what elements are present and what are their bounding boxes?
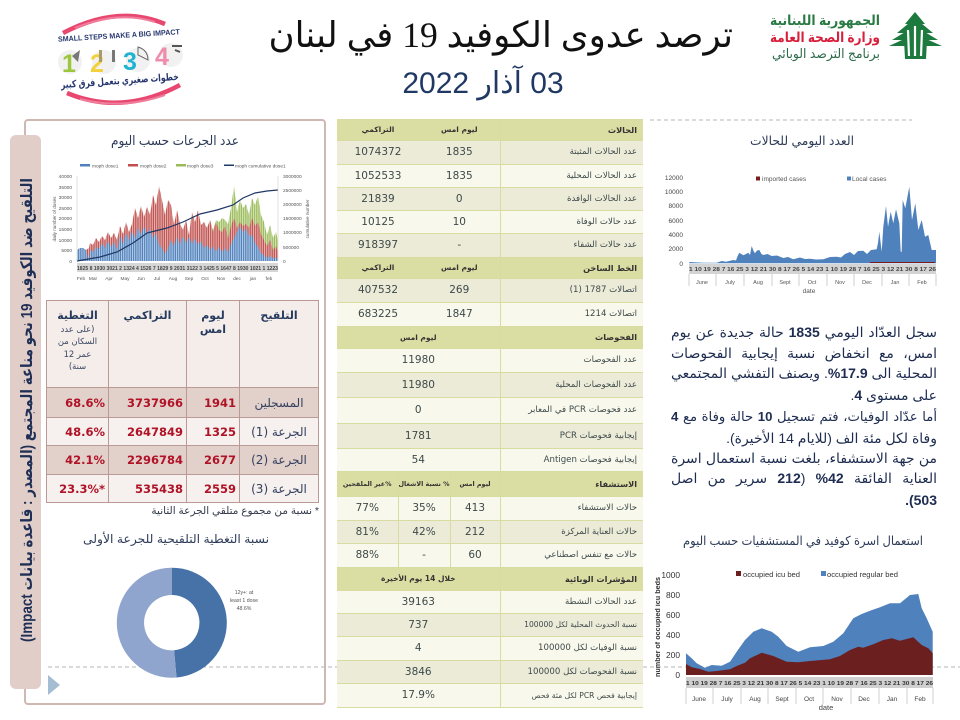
section: hospitalization: 81% [356, 526, 379, 538]
chart: first dose donut [117, 568, 258, 678]
table: vaccination counts: 42.1% [65, 453, 105, 467]
section: tests: 54 [412, 454, 425, 466]
logo: small steps make a big impact: 4 [155, 43, 169, 71]
chart: daily vaccine doses: moph dose3 [187, 164, 214, 170]
section: hotline: اتصالات 1214 [585, 309, 637, 319]
table: vaccination counts: (على عدد [61, 324, 94, 334]
chart: daily vaccine doses: 1825 8 1930 3021 2 1324 4 1526 7 1829 9 2031 3122 3 1425 5 1647 8 1930 1021 1 1223 [77, 266, 278, 272]
chart: daily vaccine doses: dec [233, 276, 241, 282]
logo: ministry of public health: برنامج الترصد الوبائي [772, 46, 880, 62]
chart: daily vaccine doses: moph dose1 [92, 164, 119, 170]
section: epidemiological indicators: نسبة الحدوث المحلية لكل 100000 [524, 620, 637, 629]
section: hospitalization: حالات العناية المركزة [561, 527, 637, 537]
section: cases [337, 120, 643, 257]
section: hospitalization [337, 472, 643, 567]
table: vaccination counts: 2647849 [127, 424, 183, 438]
section: epidemiological indicators: 737 [408, 619, 428, 631]
chart: occupied hospital beds: 800 [666, 590, 680, 600]
section: epidemiological indicators: إيجابية فحص PCR لكل مئة فحص [532, 691, 637, 700]
chart: daily vaccine doses: Sep [185, 276, 194, 282]
section: hospitalization: الاستشفاء [595, 479, 637, 489]
chart: daily vaccine doses: Nov [217, 276, 226, 282]
text block: daily summary: وفاة لكل مئة الف (للايام 14 الأخيرة). [726, 430, 937, 446]
chart: daily vaccine doses: moph dose2 [140, 164, 167, 170]
table: vaccination counts: السكان من [58, 336, 97, 346]
table: vaccination counts: 535438 [135, 482, 183, 496]
text block: daily summary: أما عدّاد الوفيات، فتم تسجيل 10 حالة وفاة مع 4 [671, 409, 937, 424]
section: hospitalization: - [422, 549, 426, 561]
section: tests: 0 [415, 404, 422, 416]
section: epidemiological indicators: عدد الحالات النشطة [565, 597, 637, 607]
chart: occupied hospital beds: June [692, 696, 706, 703]
section: cases: عدد حالات الشفاء [574, 240, 637, 250]
chart: daily cases: 2000 [669, 246, 683, 253]
section: hospitalization: %غير الملقحين [343, 480, 392, 488]
chart: daily vaccine doses: 2000000 [283, 202, 302, 208]
chart: daily cases: 12000 [665, 175, 683, 182]
section: hotline: الخط الساخن [583, 263, 637, 273]
logo: small steps make a big impact: خطوات صغيري بتعمل فرق كبير [60, 72, 179, 91]
logo: ministry of public health [770, 12, 942, 62]
chart: daily vaccine doses: Mar [89, 276, 98, 282]
chart: occupied hospital beds: Sept [775, 696, 789, 703]
icon: cedar tree [889, 12, 942, 59]
section: epidemiological indicators: 4 [415, 642, 422, 654]
date: 03 آذار 2022 [402, 67, 564, 100]
logo: ministry of public health: الجمهورية اللبنانية [770, 12, 880, 29]
icon: slide arrow [48, 675, 60, 695]
section: hospitalization: ليوم امس [459, 480, 491, 488]
chart: daily vaccine doses: cumulative number [305, 199, 310, 238]
table: vaccination counts: 23.3%* [59, 482, 105, 496]
chart: daily vaccine doses: 35000 [59, 185, 72, 191]
chart: daily cases: Aug [753, 280, 763, 286]
section: hospitalization: 88% [356, 549, 379, 561]
section: epidemiological indicators: نسبة الفحوصات لكل 100000 [528, 667, 637, 677]
footnote: second dose: * نسبة من مجموع متلقي الجرعة الثانية [151, 505, 319, 517]
table: vaccination counts: 68.6% [65, 396, 105, 410]
text block: daily summary: على مستوى 4. [850, 387, 937, 403]
chart: occupied hospital beds: 600 [666, 610, 680, 620]
chart: daily vaccine doses: Jun [137, 276, 145, 282]
section: cases: عدد الحالات المحلية [566, 171, 637, 181]
chart: daily vaccine doses: 0 [69, 259, 72, 265]
chart: daily vaccine doses: 25000 [59, 206, 72, 212]
chart: occupied hospital beds: Dec [858, 696, 871, 703]
section: cases: 1074372 [355, 146, 401, 158]
text block: daily summary: 503). [905, 492, 937, 508]
table: vaccination counts: الجرعة (1) [251, 424, 307, 438]
section: cases: عدد الحالات المثبتة [570, 147, 637, 157]
chart: daily vaccine doses: 30000 [59, 195, 72, 201]
table: vaccination counts: ليوم [201, 309, 225, 322]
section: tests: عدد فحوصات PCR في المعابر [528, 405, 637, 415]
chart: daily cases: June [696, 280, 708, 286]
chart: daily vaccine doses: 20000 [59, 216, 72, 222]
text block: daily summary [671, 324, 937, 508]
section: hotline: ليوم امس [441, 263, 478, 272]
chart: daily cases: July [725, 280, 735, 286]
section: cases: 918397 [358, 239, 398, 251]
section: hotline [337, 258, 643, 326]
chart: daily cases: Oct [808, 280, 817, 286]
section: cases: 10 [453, 216, 466, 228]
logo: small steps make a big impact: 3 [123, 48, 137, 76]
chart: daily cases: imported cases [762, 176, 807, 183]
section: tests: إيجابية فحوصات PCR [560, 431, 637, 441]
section: tests: ليوم امس [400, 333, 437, 342]
section: hotline: التراكمي [362, 263, 394, 272]
section: hospitalization: 35% [412, 502, 436, 514]
table: vaccination counts: التلقيح [260, 309, 298, 322]
section: epidemiological indicators: 3846 [405, 666, 432, 678]
chart: daily cases: 6000 [669, 218, 683, 225]
chart: daily vaccine doses: Jul [154, 276, 160, 282]
section: tests: عدد الفحوصات [583, 355, 637, 365]
table: vaccination counts: امس [200, 323, 226, 336]
chart: daily vaccine doses: 1000000 [283, 230, 302, 236]
panel: vaccination frame [25, 120, 325, 704]
chart: daily cases: date [803, 288, 816, 295]
table: vaccination counts: عمر 12 [64, 349, 91, 359]
section: hospitalization: 60 [468, 549, 482, 561]
table: vaccination counts: 3737966 [127, 396, 183, 410]
chart: daily cases: Nov [835, 280, 845, 286]
chart: daily vaccine doses: May [120, 276, 130, 282]
logo: small steps make a big impact [58, 16, 183, 104]
section: epidemiological indicators: المؤشرات الوبائية [565, 574, 637, 584]
section: epidemiological indicators: خلال 14 يوم الأخيرة [381, 574, 456, 583]
section: cases: - [457, 239, 461, 251]
table: vaccination counts: 1325 [204, 424, 236, 438]
section: hotline: اتصالات 1787 (1) [570, 285, 637, 295]
chart: occupied hospital beds: Aug [749, 696, 761, 703]
section: hotline: 1847 [446, 308, 473, 320]
table: vaccination counts: 2559 [204, 482, 236, 496]
chart: daily cases: Feb [917, 280, 927, 286]
logo: ministry of public health: وزارة الصحة العامة [770, 29, 880, 46]
chart: daily vaccine doses: jan [249, 276, 257, 282]
table: vaccination counts: الجرعة (2) [251, 453, 307, 467]
section: cases: عدد الحالات الوافدة [567, 194, 637, 204]
section: epidemiological indicators: 39163 [402, 596, 435, 608]
chart: daily vaccine doses [52, 164, 310, 282]
section: tests: 1781 [405, 430, 432, 442]
section: hospitalization: حالات الاستشفاء [578, 503, 637, 513]
section: tests: 11980 [402, 379, 435, 391]
chart: first dose donut: least 1 dose [230, 598, 258, 604]
text block: daily summary: من جهة الاستشفاء، بلغت نسبة استعمال اسرة [671, 450, 937, 466]
heading: daily cases: العدد اليومي للحالات [750, 134, 854, 149]
chart: occupied hospital beds: Oct [804, 696, 814, 703]
chart: daily cases: Dec [862, 280, 872, 286]
section: hospitalization: 77% [356, 502, 379, 514]
section: cases: ليوم امس [441, 125, 478, 134]
table: vaccination counts [46, 300, 319, 503]
section: cases: 1835 [446, 170, 473, 182]
chart: daily vaccine doses: 3000000 [283, 174, 302, 180]
section: tests [337, 327, 643, 471]
section: hotline: 407532 [358, 284, 398, 296]
chart: occupied hospital beds: number of occupied icu beds [655, 577, 662, 677]
table: vaccination counts: المسجلين [254, 396, 304, 410]
table: vaccination counts: 1941 [204, 396, 236, 410]
chart: occupied hospital beds: 400 [666, 630, 680, 640]
section: cases: التراكمي [362, 125, 394, 134]
table: vaccination counts: 48.6% [65, 424, 105, 438]
chart: occupied hospital beds: 0 [675, 670, 680, 680]
section: cases: 21839 [361, 193, 395, 205]
chart: occupied hospital beds: 1000 [661, 570, 680, 580]
section: hospitalization: % نسبة الاشغال [398, 480, 450, 488]
chart: daily vaccine doses: moph cumulative dose1 [235, 164, 286, 170]
chart: daily vaccine doses: Aug [169, 276, 178, 282]
section: hospitalization: 42% [412, 526, 436, 538]
chart: occupied hospital beds: Jan [887, 696, 898, 703]
section: tests: عدد الفحوصات المحلية [555, 380, 637, 390]
section: tests: إيجابية فحوصات Antigen [544, 455, 637, 465]
section: cases: 0 [456, 193, 463, 205]
chart: occupied hospital beds: July [721, 696, 734, 703]
section: hospitalization: 413 [465, 502, 485, 514]
chart: daily vaccine doses: 5000 [61, 248, 72, 254]
section: tests: الفحوصات [595, 332, 637, 342]
section: cases: 10125 [361, 216, 395, 228]
chart: daily vaccine doses: Feb [77, 276, 85, 282]
table: vaccination counts: سنة) [69, 361, 86, 371]
section: epidemiological indicators [337, 568, 643, 707]
chart: first dose donut: 12y+: at [235, 590, 254, 596]
section: cases: عدد حالات الوفاة [576, 217, 637, 227]
chart: occupied hospital beds: occupied regular bed [827, 570, 898, 579]
sidebar: vaccination heading [10, 135, 41, 689]
chart: occupied hospital beds: date [819, 703, 833, 712]
sidebar: vaccination heading: (Impact التلقيح ضد الكوفيد 19 نحو مناعة المجتمع (المصدر : قاعدة بيانات [19, 178, 36, 642]
table: daily indicators [337, 119, 643, 708]
section: hotline: 269 [449, 284, 469, 296]
chart: daily cases: Sept [779, 280, 791, 286]
title: ترصد عدوى الكوفيد 19 في لبنان [268, 15, 733, 55]
chart: daily cases: 4000 [669, 232, 683, 239]
chart: daily cases: 8000 [669, 203, 683, 210]
section: tests: 11980 [402, 354, 435, 366]
chart: occupied hospital beds: 200 [666, 650, 680, 660]
section: hotline: 683225 [358, 308, 398, 320]
section: epidemiological indicators: 17.9% [402, 689, 435, 701]
table: vaccination counts: التغطية [57, 309, 98, 322]
chart: daily cases: 10000 [665, 189, 683, 196]
heading: doses per day: عدد الجرعات حسب اليوم [111, 133, 239, 149]
chart: daily vaccine doses: feb [266, 276, 273, 282]
section: cases: 1052533 [355, 170, 401, 182]
chart: occupied hospital beds: 1 10 19 28 7 16 25 3 12 21 30 8 17 26 5 14 23 1 10 19 28 7 16 25 3 12 21 30 8 17 26 [686, 681, 933, 687]
chart: daily cases: Jan [891, 280, 899, 286]
chart: daily vaccine doses: 40000 [59, 174, 72, 180]
text block: daily summary: امس، مع انخفاض نسبة إيجابية الفحوصات [671, 345, 937, 361]
chart: occupied hospital beds: Nov [831, 696, 844, 703]
chart: daily vaccine doses: 15000 [59, 227, 72, 233]
chart: daily cases: 1 10 19 28 7 16 25 3 12 21 30 8 17 26 5 14 23 1 10 19 28 7 16 25 3 12 21 30 8 17 26 [689, 267, 936, 273]
section: hospitalization: 212 [465, 526, 485, 538]
chart: occupied hospital beds [655, 570, 933, 712]
logo: small steps make a big impact: 1 [62, 50, 76, 78]
logo: small steps make a big impact: 2 [90, 50, 104, 78]
chart: daily vaccine doses: 2500000 [283, 188, 302, 194]
chart: daily cases [665, 175, 936, 295]
text block: daily summary: المحلية الى 17.9%. ويصنف التفشي المجتمعي [671, 365, 937, 381]
chart: occupied hospital beds: Feb [914, 696, 926, 703]
table: vaccination counts: 2296784 [127, 453, 183, 467]
heading: hospital beds: استعمال اسرة كوفيد في المستشفيات حسب اليوم [683, 534, 923, 549]
section: hospitalization: حالات مع تنفس اصطناعي [544, 550, 637, 560]
table: vaccination counts: 2677 [204, 453, 236, 467]
chart: daily cases: 0 [679, 261, 683, 268]
text block: daily summary: العناية الفائقة 42% (212 سرير من اصل [671, 470, 937, 486]
chart: daily vaccine doses: Apr [105, 276, 113, 282]
chart: daily vaccine doses: 1500000 [283, 216, 302, 222]
chart: daily vaccine doses: 500000 [283, 245, 299, 251]
table: vaccination counts: الجرعة (3) [251, 482, 307, 496]
section: cases: الحالات [608, 125, 637, 135]
chart: daily vaccine doses: Oct [201, 276, 209, 282]
logo: small steps make a big impact: SMALL STEPS MAKE A BIG IMPACT [58, 27, 180, 44]
chart: daily vaccine doses: 0 [283, 259, 286, 265]
table: vaccination counts: التراكمي [124, 309, 171, 322]
chart: occupied hospital beds: occupied icu bed [743, 570, 800, 579]
heading: first dose coverage: نسبة التغطية التلقيحية للجرعة الأولى [83, 531, 269, 547]
section: epidemiological indicators: نسبة الوفيات لكل 100000 [538, 643, 637, 653]
chart: first dose donut: 48.6% [237, 606, 252, 612]
chart: daily vaccine doses: 10000 [59, 238, 72, 244]
section: cases: 1835 [446, 146, 473, 158]
chart: daily vaccine doses: daily number of doses [52, 196, 57, 241]
text block: daily summary: سجل العدّاد اليومي 1835 حالة جديدة عن يوم [671, 324, 937, 340]
chart: daily cases: Local cases [852, 176, 887, 183]
